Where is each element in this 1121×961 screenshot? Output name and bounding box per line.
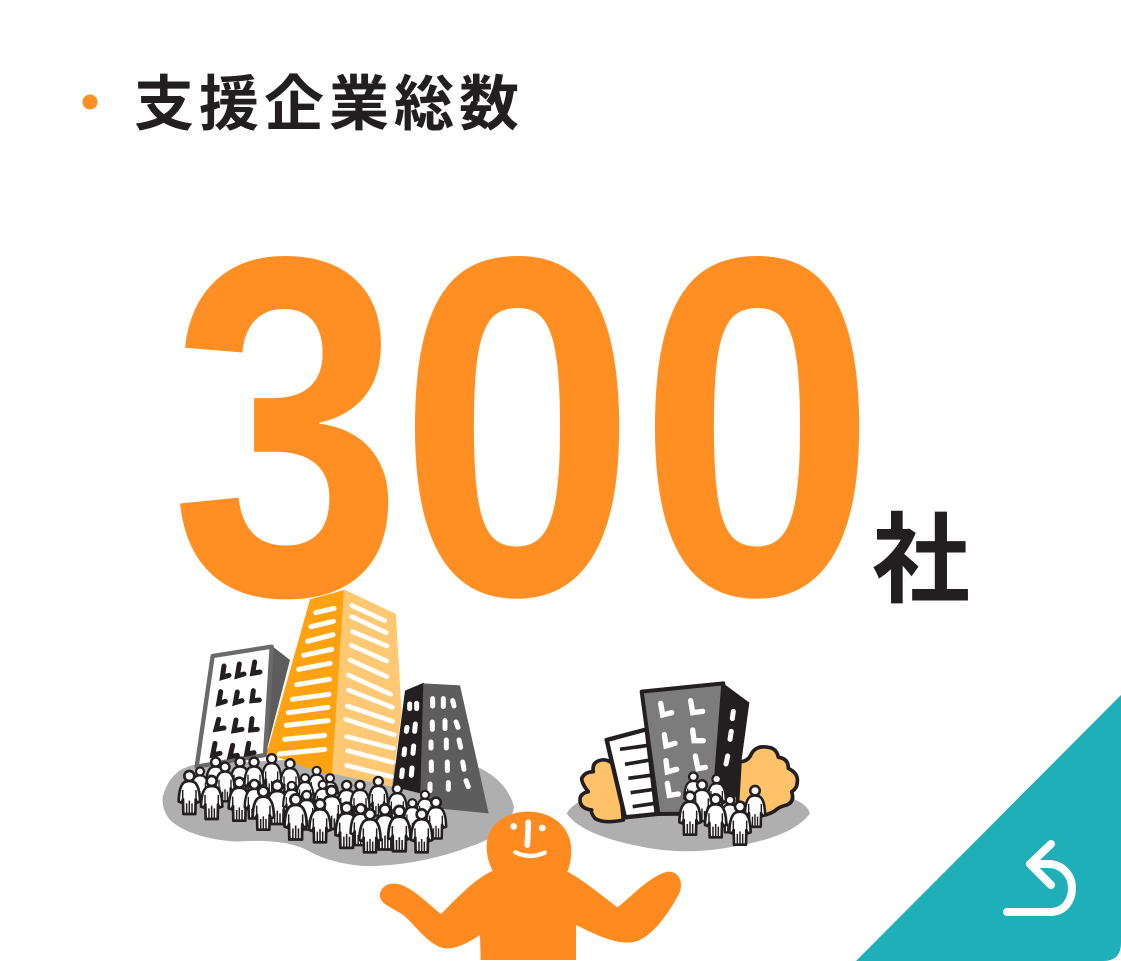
big number 300: 0: [398, 156, 637, 697]
big number 300: [170, 155, 877, 697]
dark building: [393, 683, 489, 813]
crowd: [179, 754, 446, 852]
big number 300: 3: [170, 155, 403, 697]
bushes: [580, 760, 623, 822]
illustration: small company with group: [567, 683, 810, 851]
group: [679, 773, 765, 845]
white low building: [607, 729, 657, 817]
heading bullet: [82, 94, 98, 110]
unit: 社: [872, 505, 970, 615]
gray tower: [642, 683, 723, 814]
back button corner: [856, 695, 1121, 961]
white building: [197, 646, 290, 767]
ground ellipse: [567, 793, 810, 851]
illustration: large companies with crowd: [163, 589, 514, 866]
orange tower: [267, 589, 402, 787]
black side: [713, 683, 749, 810]
illustration: smiling orange person shrugging: [380, 812, 681, 960]
icon: return arrow: [1007, 844, 1072, 912]
ground blob: [163, 760, 514, 866]
face: [510, 822, 546, 856]
title: 支援企業総数: [134, 71, 524, 138]
big number 300: 0: [638, 156, 877, 697]
